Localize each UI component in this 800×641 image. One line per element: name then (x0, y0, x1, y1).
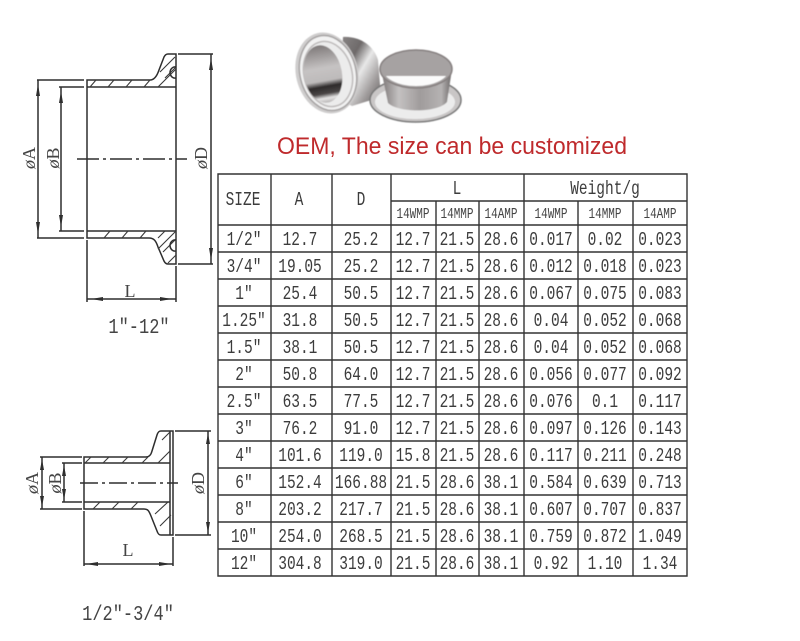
row 1.5: 0.068 (638, 338, 682, 360)
row 1.5: 38.1 (283, 338, 317, 360)
row 3: 21.5 (440, 419, 474, 441)
row 1.25: 21.5 (440, 311, 474, 333)
row 8: 21.5 (396, 500, 430, 522)
row 8: 0.707 (583, 500, 627, 522)
row 3/4: 0.012 (529, 257, 573, 279)
row 1: 21.5 (440, 284, 474, 306)
row 1: 12.7 (396, 284, 430, 306)
row 1.5: 28.6 (484, 338, 518, 360)
row 8: 28.6 (440, 500, 474, 522)
row 10: 21.5 (396, 527, 430, 549)
table header: 14AMP (644, 206, 676, 222)
row 1 (235, 284, 682, 306)
row 3/4 (227, 257, 682, 279)
row 1.5: 1.5" (227, 338, 261, 360)
row 1/2: 0.023 (638, 230, 682, 252)
drawing: 1 inch to 12 inch section (19, 54, 213, 340)
row 6: 0.584 (529, 473, 573, 495)
row 3: 0.097 (529, 419, 573, 441)
left ferrule (287, 26, 381, 120)
drawing: 1/2 inch to 3/4 inch section (22, 431, 211, 627)
table header: L (453, 179, 461, 201)
row 2.5: 77.5 (344, 392, 378, 414)
row 6: 166.88 (335, 473, 387, 495)
row 1.25: 0.068 (638, 311, 682, 333)
flange outline (84, 431, 173, 535)
row 1: 25.4 (283, 284, 317, 306)
row 2: 0.077 (583, 365, 627, 387)
row 1.25: 31.8 (283, 311, 317, 333)
row 12: 319.0 (339, 554, 383, 576)
table header: SIZE (226, 190, 260, 212)
row 3: 91.0 (344, 419, 378, 441)
row 1/2: 1/2" (227, 230, 261, 252)
row 2: 0.056 (529, 365, 573, 387)
row 12: 21.5 (396, 554, 430, 576)
row 2.5: 28.6 (484, 392, 518, 414)
row 1.25: 12.7 (396, 311, 430, 333)
row 2: 28.6 (484, 365, 518, 387)
row 1: 0.083 (638, 284, 682, 306)
table header: 14MMP (589, 206, 621, 222)
caption: 1"-12" (108, 315, 170, 340)
row 1/2: 21.5 (440, 230, 474, 252)
row 6: 21.5 (396, 473, 430, 495)
right ferrule (370, 50, 461, 122)
row 2: 64.0 (344, 365, 378, 387)
table header (226, 179, 676, 222)
row 1/2 (227, 230, 682, 252)
row 10 (231, 527, 682, 549)
drawing: 1/2 inch to 3/4 inch section: L (122, 540, 134, 560)
product photo: two stainless ferrules (287, 26, 461, 122)
row 4: 4" (235, 446, 253, 468)
row 12: 0.92 (534, 554, 568, 576)
row 4: 15.8 (396, 446, 430, 468)
row 4: 28.6 (484, 446, 518, 468)
row 6: 0.713 (638, 473, 682, 495)
dimension lines (37, 54, 213, 302)
row 1.5 (227, 338, 682, 360)
hatching (85, 432, 171, 526)
row 2.5: 0.117 (638, 392, 682, 414)
row 8: 0.837 (638, 500, 682, 522)
row 3/4: 0.018 (583, 257, 627, 279)
row 4 (235, 446, 682, 468)
table header: D (357, 190, 365, 212)
drawing: 1/2 inch to 3/4 inch section: øD (188, 472, 208, 495)
row 3/4: 19.05 (278, 257, 322, 279)
row 6: 0.639 (583, 473, 627, 495)
row 10: 1.049 (638, 527, 682, 549)
drawing: 1 inch to 12 inch section: øB (43, 147, 63, 170)
row 2 (235, 365, 682, 387)
row 4: 0.117 (529, 446, 573, 468)
row 12: 28.6 (440, 554, 474, 576)
row 6: 38.1 (484, 473, 518, 495)
row 1.5: 0.04 (534, 338, 568, 360)
row 8 (235, 500, 682, 522)
row 12: 1.10 (588, 554, 622, 576)
table grid (218, 174, 687, 576)
table header: Weight/g (570, 179, 640, 201)
table header: 14WMP (397, 206, 429, 222)
size table (218, 174, 687, 576)
table header: A (295, 190, 304, 212)
drawing: 1 inch to 12 inch section: øD (191, 147, 211, 170)
row 10: 10" (231, 527, 257, 549)
row 1.25: 0.052 (583, 311, 627, 333)
row 1: 50.5 (344, 284, 378, 306)
row 2.5: 0.076 (529, 392, 573, 414)
row 3 (235, 419, 682, 441)
row 4: 0.211 (583, 446, 627, 468)
row 4: 21.5 (440, 446, 474, 468)
row 2.5: 21.5 (440, 392, 474, 414)
row 1.25: 28.6 (484, 311, 518, 333)
row 8: 8" (235, 500, 253, 522)
centre line (80, 482, 178, 484)
row 1/2: 28.6 (484, 230, 518, 252)
row 3/4: 0.023 (638, 257, 682, 279)
row 3: 12.7 (396, 419, 430, 441)
row 2: 50.8 (283, 365, 317, 387)
caption: 1/2"-3/4" (82, 602, 174, 627)
row 1.25: 50.5 (344, 311, 378, 333)
row 3/4: 25.2 (344, 257, 378, 279)
row 8: 217.7 (339, 500, 383, 522)
row 12 (231, 554, 677, 576)
row 3/4: 12.7 (396, 257, 430, 279)
row 6: 28.6 (440, 473, 474, 495)
flange outline (87, 54, 176, 264)
row 3: 28.6 (484, 419, 518, 441)
row 1: 28.6 (484, 284, 518, 306)
row 1: 0.075 (583, 284, 627, 306)
row 8: 203.2 (278, 500, 322, 522)
arrowheads (40, 433, 210, 566)
row 2.5: 2.5" (227, 392, 261, 414)
row 1: 1" (235, 284, 253, 306)
arrowheads (36, 58, 213, 301)
table header: 14AMP (485, 206, 517, 222)
row 6: 152.4 (278, 473, 322, 495)
row 12: 12" (231, 554, 257, 576)
row 4: 0.248 (638, 446, 682, 468)
row 10: 254.0 (278, 527, 322, 549)
row 1/2: 12.7 (283, 230, 317, 252)
row 2.5: 0.1 (592, 392, 618, 414)
hatching (90, 57, 176, 263)
row 6 (235, 473, 682, 495)
row 1.25 (222, 311, 682, 333)
row 1.25: 1.25" (222, 311, 266, 333)
centre line (77, 158, 187, 160)
row 10: 268.5 (339, 527, 383, 549)
dimension labels: øA (19, 147, 39, 170)
row 10: 0.872 (583, 527, 627, 549)
row 12: 1.34 (643, 554, 677, 576)
row 3: 76.2 (283, 419, 317, 441)
title: OEM, The size can be customized (277, 133, 627, 160)
row 12: 304.8 (278, 554, 322, 576)
dimension labels: øA (22, 472, 42, 495)
row 4: 119.0 (339, 446, 383, 468)
row 3: 0.143 (638, 419, 682, 441)
row 2: 2" (235, 365, 253, 387)
row 10: 28.6 (440, 527, 474, 549)
row 2: 12.7 (396, 365, 430, 387)
row 8: 38.1 (484, 500, 518, 522)
row 2.5: 12.7 (396, 392, 430, 414)
row 3: 0.126 (583, 419, 627, 441)
row 3: 3" (235, 419, 253, 441)
row 8: 0.607 (529, 500, 573, 522)
drawing: 1/2 inch to 3/4 inch section: øB (45, 472, 65, 495)
table header: 14WMP (535, 206, 567, 222)
row 1/2: 0.02 (588, 230, 622, 252)
row 1.25: 0.04 (534, 311, 568, 333)
row 2: 0.092 (638, 365, 682, 387)
row 1/2: 25.2 (344, 230, 378, 252)
row 6: 6" (235, 473, 253, 495)
row 1.5: 12.7 (396, 338, 430, 360)
row 2.5 (227, 392, 682, 414)
row 3/4: 3/4" (227, 257, 261, 279)
dimension lines (40, 431, 211, 566)
row 10: 38.1 (484, 527, 518, 549)
row 1/2: 12.7 (396, 230, 430, 252)
row 1.5: 21.5 (440, 338, 474, 360)
row 3/4: 28.6 (484, 257, 518, 279)
row 1: 0.067 (529, 284, 573, 306)
row 1.5: 50.5 (344, 338, 378, 360)
row 3/4: 21.5 (440, 257, 474, 279)
table header: 14MMP (441, 206, 473, 222)
row 1.5: 0.052 (583, 338, 627, 360)
drawing: 1 inch to 12 inch section: L (124, 281, 136, 301)
row 12: 38.1 (484, 554, 518, 576)
row 10: 0.759 (529, 527, 573, 549)
row 1/2: 0.017 (529, 230, 573, 252)
row 2.5: 63.5 (283, 392, 317, 414)
row 4: 101.6 (278, 446, 322, 468)
row 2: 21.5 (440, 365, 474, 387)
